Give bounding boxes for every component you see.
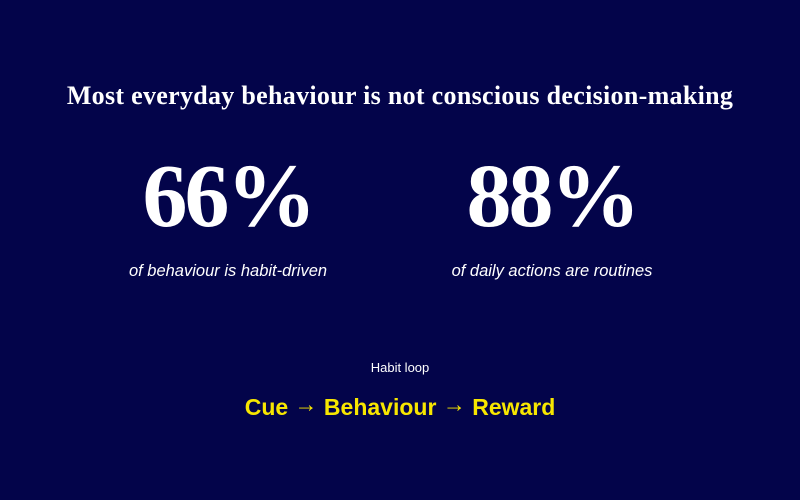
caption 88%: of daily actions are routines (452, 262, 652, 280)
habit loop sequence: Cue → Behaviour → Reward (245, 391, 555, 420)
habit loop label: Habit loop (371, 360, 429, 375)
stat: 88% (452, 147, 652, 280)
stat: 66% (129, 147, 327, 280)
number 66%: 66% (142, 147, 314, 246)
number 88%: 88% (466, 147, 638, 246)
caption 66%: of behaviour is habit-driven (129, 262, 327, 280)
title: Most everyday behaviour is not conscious decision-making (67, 81, 733, 110)
